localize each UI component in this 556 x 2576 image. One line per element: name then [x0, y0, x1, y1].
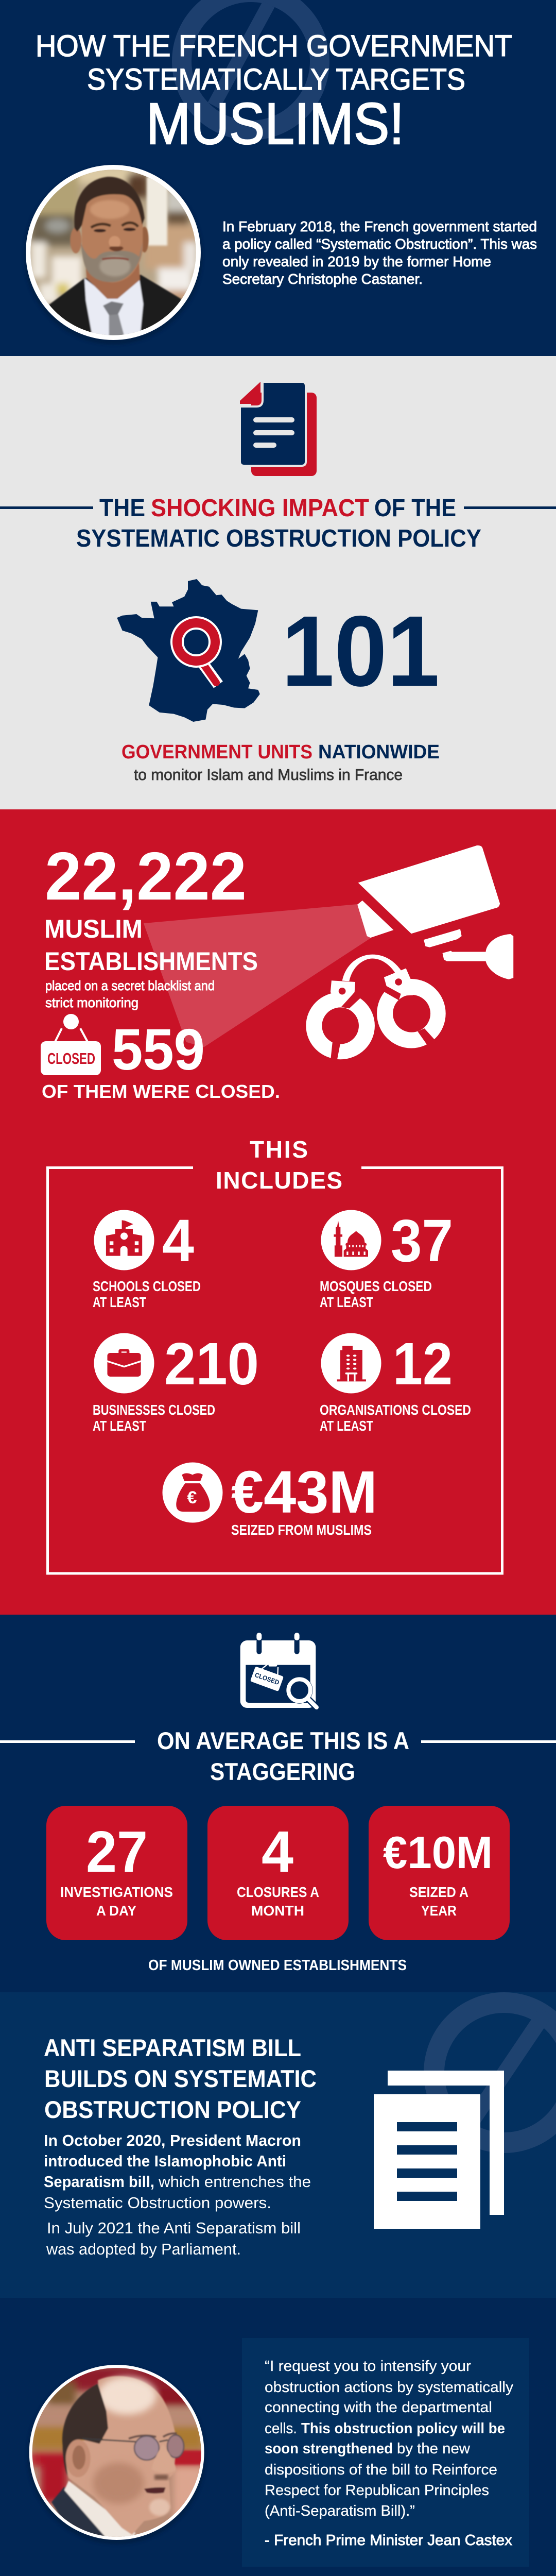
text: bill description: Separatism bill, [44, 2173, 154, 2191]
stat: schools [93, 1207, 201, 1310]
icon: closed sign: CLOSED [47, 1049, 95, 1067]
stat: 559 closed: OF THEM WERE CLOSED. [42, 1081, 280, 1102]
stat: 101: 101 [282, 595, 440, 707]
stat: mosques: 37 [391, 1207, 453, 1274]
stat: organisations: AT LEAST [320, 1418, 373, 1434]
stat: businesses: 210 [164, 1330, 259, 1397]
icon: map of France with magnifier [117, 579, 260, 722]
title: MUSLIMS! [146, 91, 404, 156]
stat: mosques: MOSQUES CLOSED [320, 1278, 432, 1294]
section background: quote [0, 2298, 556, 2576]
card: investigations a day: A DAY [96, 1903, 136, 1919]
heading: shocking impact: OF THE [374, 495, 456, 522]
icon: calendar with closed sign [240, 1633, 317, 1708]
stat: organisations: ORGANISATIONS CLOSED [320, 1402, 471, 1418]
heading: anti separatism bill: ANTI SEPARATISM BILL [44, 2034, 301, 2061]
icon: calendar with closed sign: CLOSED [254, 1671, 280, 1686]
text: bill description: introduced the Islamophobic Anti [44, 2152, 286, 2170]
heading: shocking impact: SHOCKING IMPACT [151, 495, 369, 522]
title: HOW THE FRENCH GOVERNMENT [36, 29, 512, 63]
stat: 22,222 muslim establishments: placed on a secret blacklist and [45, 978, 215, 993]
icon: surveillance camera [357, 845, 513, 979]
quote box [242, 2338, 529, 2567]
stat: organisations [320, 1330, 471, 1434]
stat: money seized [163, 1459, 377, 1538]
icon: handcuffs [306, 957, 446, 1061]
text: bill description: In July 2021 the Anti Separatism bill [47, 2219, 301, 2237]
stat: 559 closed [42, 1017, 280, 1102]
heading: shocking impact [0, 495, 556, 552]
heading: on average [0, 1727, 556, 1785]
heading: anti separatism bill: BUILDS ON SYSTEMATIC [44, 2065, 317, 2092]
icon: stacked documents [374, 2071, 504, 2229]
stat: money seized: SEIZED FROM MUSLIMS [231, 1522, 372, 1538]
heading: on average: STAGGERING [210, 1758, 355, 1785]
portrait: Jean Castex [27, 2365, 206, 2545]
section background: impact [0, 356, 556, 809]
quote box: This obstruction policy will be [301, 2420, 505, 2437]
quote box: “I request you to intensify your [265, 2358, 471, 2375]
card: seized a year [369, 1806, 510, 1940]
watermark: prohibition sign header [182, 0, 320, 130]
stat: 559 closed: 559 [112, 1017, 205, 1082]
label: government units nationwide: NATIONWIDE [318, 741, 440, 763]
card: seized a year: SEIZED A [409, 1884, 468, 1900]
section background: red statistics [0, 809, 556, 1615]
stat: businesses: AT LEAST [93, 1418, 146, 1434]
quote box: connecting with the departmental [265, 2399, 492, 2416]
stat: 22,222 muslim establishments [44, 838, 258, 1010]
stat: 22,222 muslim establishments: MUSLIM [44, 914, 143, 943]
stat: mosques [320, 1207, 453, 1310]
intro text: Secretary Christophe Castaner. [222, 271, 423, 287]
text: of muslim owned establishments: OF MUSLIM OWNED ESTABLISHMENTS [148, 1957, 407, 1974]
quote box: Respect for Republican Principles [265, 2482, 489, 2499]
stat: money seized: € [187, 1488, 197, 1507]
stat: mosques: AT LEAST [320, 1294, 373, 1310]
surveillance beam [144, 904, 371, 1047]
text: bill description: In October 2020, President Macron [44, 2131, 301, 2149]
title [36, 29, 512, 156]
heading: this includes [216, 1136, 342, 1194]
intro text: only revealed in 2019 by the former Home [222, 253, 491, 269]
intro text: In February 2018, the French government started [222, 218, 537, 234]
section background: averages [0, 1615, 556, 1992]
stat: 22,222 muslim establishments: 22,222 [45, 838, 247, 914]
quote box: soon strengthened [265, 2441, 393, 2457]
quote box: cells. [265, 2420, 297, 2437]
heading: anti separatism bill: OBSTRUCTION POLICY [44, 2096, 301, 2123]
quote box: (Anti-Separatism Bill).” [265, 2503, 415, 2519]
card: seized a year: YEAR [421, 1903, 457, 1919]
stat: businesses: BUSINESSES CLOSED [93, 1402, 215, 1418]
heading: on average: ON AVERAGE THIS IS A [157, 1727, 409, 1754]
intro text [222, 218, 537, 287]
card: closures a month: 4 [262, 1819, 293, 1884]
text: to monitor Islam: to monitor Islam and Muslims in France [134, 766, 403, 784]
section background: anti separatism bill [0, 1992, 556, 2298]
card: closures a month: CLOSURES A [237, 1884, 319, 1900]
text: bill description: was adopted by Parliament. [46, 2240, 241, 2258]
icon: closed sign [41, 1014, 101, 1075]
watermark: prohibition sign bill section [434, 2003, 556, 2143]
heading: this includes: INCLUDES [216, 1167, 342, 1194]
stat: businesses [93, 1330, 259, 1434]
label: government units nationwide [121, 741, 440, 763]
quote box: dispositions of the bill to Reinforce [265, 2462, 497, 2478]
quote box: obstruction actions by systematically [265, 2379, 514, 2396]
section background: header [0, 0, 556, 356]
stat: organisations: 12 [393, 1330, 453, 1397]
label: government units nationwide: GOVERNMENT UNITS [121, 741, 312, 763]
quote box: - French Prime Minister Jean Castex [265, 2532, 513, 2549]
stat: schools: 4 [162, 1207, 194, 1274]
text: bill description [44, 2131, 311, 2258]
stat: 22,222 muslim establishments: ESTABLISHMENTS [44, 947, 258, 976]
stat: schools: AT LEAST [93, 1294, 146, 1310]
frame: includes box [47, 1167, 502, 1573]
card: investigations a day: INVESTIGATIONS [60, 1884, 173, 1900]
stat: 22,222 muslim establishments: strict monitoring [45, 995, 138, 1010]
heading: this includes: THIS [250, 1136, 308, 1163]
stat: schools: SCHOOLS CLOSED [93, 1278, 201, 1294]
portrait: Christophe Castaner [24, 165, 202, 345]
card: investigations a day [46, 1806, 187, 1940]
heading: shocking impact: SYSTEMATIC OBSTRUCTION POLICY [76, 525, 481, 552]
stat: money seized: €43M [231, 1459, 377, 1526]
icon: document [240, 382, 317, 476]
title: SYSTEMATICALLY TARGETS [87, 63, 465, 96]
card: closures a month [207, 1806, 349, 1940]
text: bill description: which entrenches the [158, 2173, 311, 2191]
card: closures a month: MONTH [251, 1903, 304, 1919]
quote box: by the new [397, 2441, 471, 2457]
heading: anti separatism bill [44, 2034, 317, 2123]
heading: shocking impact: THE [99, 495, 145, 522]
text: bill description: Systematic Obstruction powers. [44, 2194, 271, 2212]
intro text: a policy called “Systematic Obstruction”. This was [222, 236, 537, 252]
card: investigations a day: 27 [86, 1819, 148, 1884]
card: seized a year: €10M [383, 1827, 493, 1878]
